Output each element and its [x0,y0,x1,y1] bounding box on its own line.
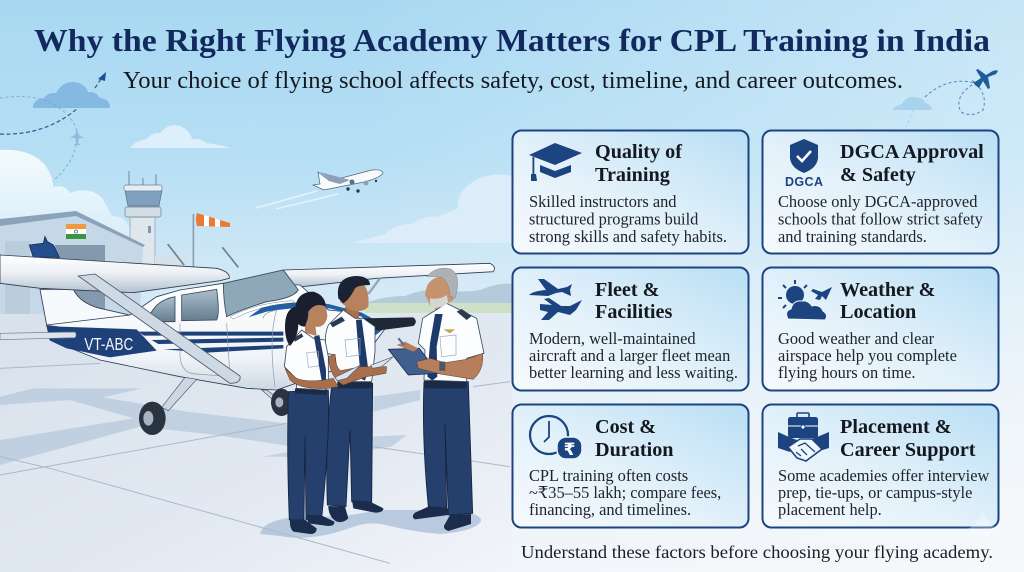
flag: India [66,224,86,239]
decoration: large white cloud right [350,175,512,243]
icon: DGCA shield [785,139,823,189]
clipboard [388,348,438,375]
fuselage [47,283,387,390]
card text: strong skills and safety habits. [529,227,727,246]
card heading: Placement & [840,416,952,438]
card text: and training standards. [778,227,927,246]
card text: prep, tie-ups, or campus-style [778,483,972,502]
card: Weather & Location [762,268,998,390]
apron ground [0,313,512,572]
card text: Choose only DGCA-approved [778,192,977,211]
decoration: large white cloud left [0,150,132,260]
card text: Skilled instructors and [529,192,676,211]
sparkle watermark [966,512,1000,540]
card heading: Location [840,301,916,323]
control tower [124,171,162,267]
card heading: Cost & [595,416,656,438]
card text: better learning and less waiting. [529,363,738,382]
decoration: top-right cloud and plane [893,69,998,127]
card: Fleet & Facilities [512,268,748,390]
card: Placement & Career Support [762,404,998,528]
near wing [0,255,229,293]
card heading: Duration [595,439,674,461]
propeller and spinner [363,317,416,331]
icon: aircraft pair [529,279,582,320]
icon: briefcase and handshake [778,413,829,461]
windsock [193,213,230,268]
decoration: top-left cloud and flight path [0,72,110,208]
card heading: Facilities [595,301,673,323]
windows [150,297,175,322]
card heading: Fleet & [595,279,659,301]
card heading: Training [595,164,670,186]
card text: schools that follow strict safety [778,210,984,228]
icon: DGCA shield: DGCA [785,175,823,189]
card text: flying hours on time. [778,363,916,382]
card heading: DGCA Approval [840,141,984,163]
title: Why the Right Flying Academy Matters for CPL Training in India [34,23,990,58]
icon: sun, cloud, plane [778,280,832,320]
pilot: woman trainee [284,292,361,534]
pilot: senior captain [388,268,484,531]
card heading: Weather & [840,279,936,301]
distant hills and grass [365,284,512,313]
icon: clock and rupee coins [530,416,582,460]
training aircraft VT-ABC [0,237,494,435]
card text: ~₹35–55 lakh; compare fees, [529,483,721,502]
card: DGCA Approval & Safety [762,130,998,254]
card text: Some academies offer interview [778,466,989,485]
card text: placement help. [778,500,882,519]
card text: Modern, well-maintained [529,329,696,348]
far wing and struts [168,244,238,267]
card text: financing, and timelines. [529,500,691,519]
card: Cost & Duration [512,404,748,528]
decoration: small white cloud [130,125,230,148]
registration: VT-ABC [84,334,133,354]
people ground shadow [260,510,481,538]
card: Quality of Training [512,130,748,254]
icon: clock and rupee coins: ₹ [564,440,575,460]
landing gear [162,377,197,411]
fin cap [29,237,59,257]
navy livery [47,325,157,357]
card text: Good weather and clear [778,329,935,348]
wing strut [78,274,240,383]
sky airliner with contrails [256,170,383,209]
hangar [0,211,187,314]
icon: graduation cap [529,143,582,181]
card heading: Quality of [595,141,682,163]
card text: airspace help you complete [778,346,957,365]
ground shadows and apron lines [0,363,510,563]
card text: structured programs build [529,210,698,228]
footer note: Understand these factors before choosing your flying academy. [521,542,993,562]
card text: CPL training often costs [529,466,688,485]
subtitle: Your choice of flying school affects safety, cost, timeline, and career outcomes. [123,67,903,94]
card heading: Career Support [840,439,976,461]
card text: aircraft and a larger fleet mean [529,346,730,365]
card heading: & Safety [840,164,916,186]
pilot: man in middle [325,276,393,522]
tail fin [40,289,131,327]
cowling [248,302,387,336]
